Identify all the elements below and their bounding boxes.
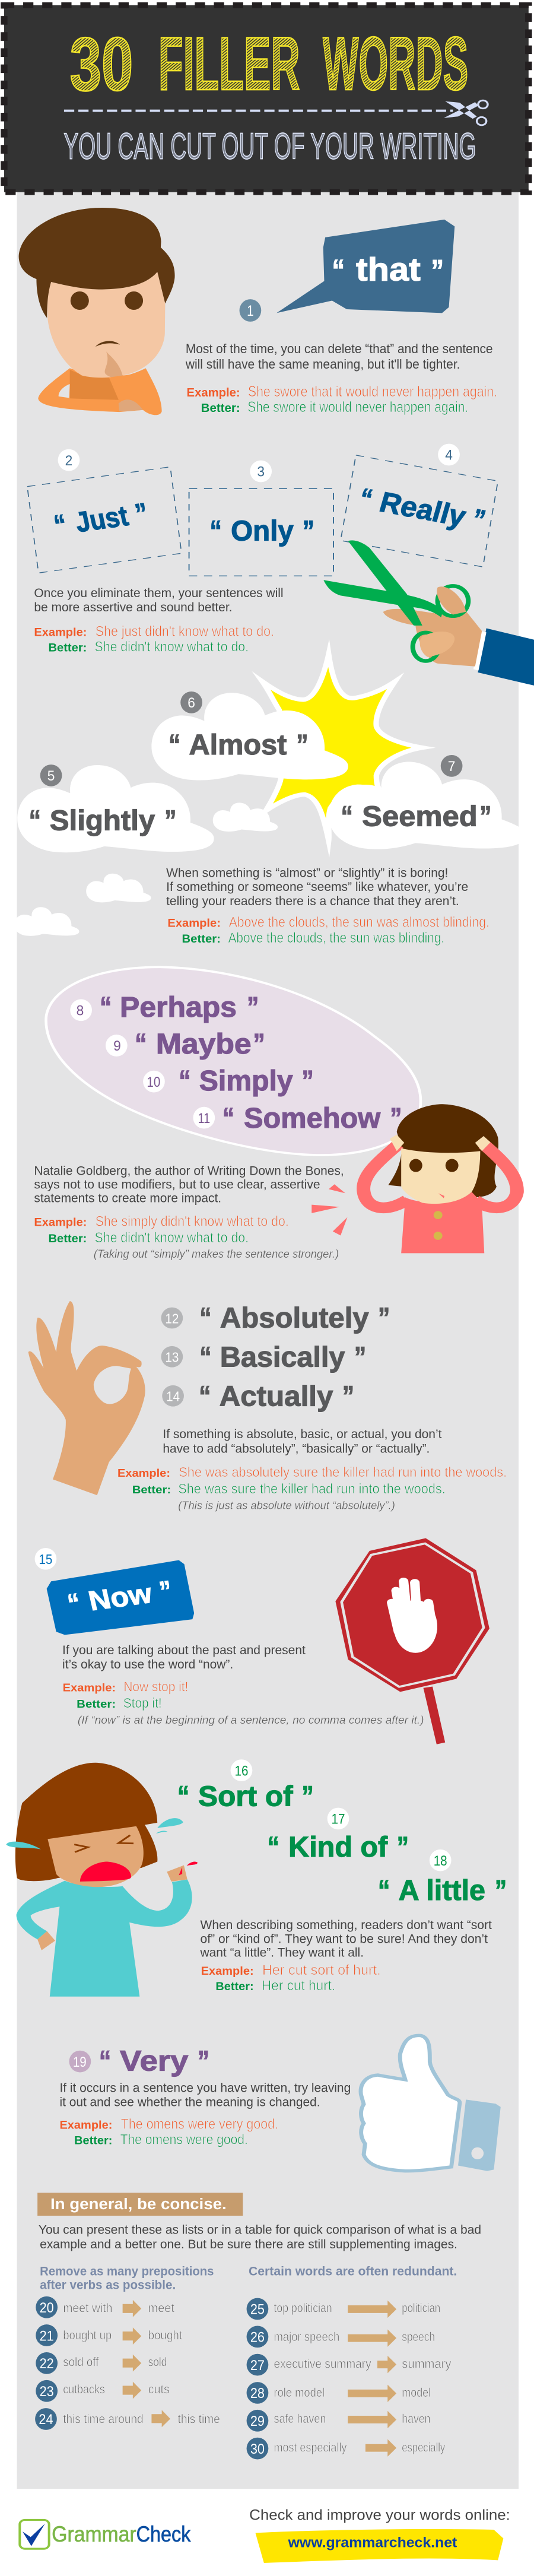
cut-out box: Only: Only bbox=[231, 515, 294, 547]
number 14 bbox=[162, 1385, 184, 1407]
example: simply: She didn't know what to do. bbox=[95, 1230, 249, 1245]
item 21 bbox=[36, 2324, 182, 2346]
number 16: 16 bbox=[234, 1763, 248, 1779]
heading: be concise bbox=[37, 2193, 243, 2216]
number 6 bbox=[180, 691, 202, 713]
thought bubble: modifiers: Maybe bbox=[156, 1028, 252, 1059]
icon: cut line and scissors bbox=[64, 100, 488, 125]
item 30: 30 bbox=[250, 2441, 265, 2457]
item 26: major speech bbox=[274, 2330, 339, 2344]
item 22: 22 bbox=[40, 2356, 54, 2371]
cut-out box: Just: Just bbox=[72, 500, 131, 538]
small clouds bbox=[14, 802, 278, 936]
subheading: prepositions: after verbs as possible. bbox=[40, 2278, 176, 2292]
words: Absolutely Basically Actually: ” bbox=[354, 1341, 366, 1373]
example: now: Better: bbox=[77, 1698, 116, 1711]
example: simply bbox=[34, 1213, 339, 1261]
words: Absolutely Basically Actually: “ bbox=[199, 1380, 211, 1412]
illustration: stop sign bbox=[335, 1538, 490, 1744]
cut-out box: Really: Really bbox=[376, 486, 469, 532]
example: that: Example: bbox=[187, 386, 240, 399]
words: Absolutely Basically Actually: Actually bbox=[220, 1380, 333, 1412]
item 22: sold bbox=[148, 2355, 167, 2369]
item 25: politician bbox=[402, 2301, 440, 2315]
example: absolutely bbox=[117, 1464, 507, 1512]
number 18: 18 bbox=[434, 1853, 447, 1868]
item 27: 27 bbox=[250, 2358, 265, 2373]
text: Natalie Goldberg: statements to create more impact. bbox=[34, 1191, 221, 1205]
example: very: Better: bbox=[74, 2134, 112, 2147]
text: once you eliminate bbox=[34, 586, 284, 614]
example: now: Stop it! bbox=[123, 1695, 162, 1711]
cut-out box: Only bbox=[189, 488, 333, 576]
text: Natalie Goldberg: says not to use modifiers, but to use clear, assertive bbox=[34, 1178, 320, 1192]
number 7: 7 bbox=[448, 759, 455, 774]
speech bubble: that: ” bbox=[431, 253, 444, 287]
number 14: 14 bbox=[166, 1389, 180, 1404]
subheading: redundant: Certain words are often redundant. bbox=[249, 2264, 457, 2279]
thought bubble: modifiers: “ bbox=[223, 1103, 234, 1134]
speech bubble: that: “ bbox=[332, 253, 345, 287]
words: Sort of Kind of A little bbox=[177, 1781, 507, 1906]
example: sort of bbox=[201, 1962, 381, 1994]
thought bubble: modifiers: Simply bbox=[199, 1065, 293, 1096]
cut-out box: Really bbox=[341, 455, 498, 567]
item 24 bbox=[35, 2408, 220, 2430]
number 3 bbox=[250, 461, 272, 482]
words: Sort of Kind of A little: ” bbox=[302, 1781, 314, 1812]
cut-out box: Just: “ bbox=[51, 509, 70, 541]
thought bubble: modifiers: Perhaps bbox=[120, 991, 237, 1023]
words: Sort of Kind of A little: “ bbox=[268, 1832, 279, 1863]
banner: Now: Now bbox=[85, 1578, 155, 1617]
cut-out box: Only: ” bbox=[303, 515, 314, 547]
speech bubble: that bbox=[276, 220, 454, 313]
cloud: Almost bbox=[151, 693, 348, 781]
thought bubble: modifiers: ” bbox=[253, 1028, 265, 1059]
thought bubble: modifiers: “ bbox=[179, 1065, 190, 1096]
example: almost bbox=[167, 915, 490, 946]
word: Very: ” bbox=[198, 2045, 209, 2077]
words: Sort of Kind of A little: ” bbox=[397, 1832, 409, 1863]
number 6: 6 bbox=[187, 695, 195, 710]
example: absolutely: Example: bbox=[117, 1467, 170, 1479]
item 28: 28 bbox=[250, 2385, 265, 2401]
item 27: executive summary bbox=[274, 2357, 371, 2371]
example: just: Example: bbox=[34, 626, 87, 639]
item 23 bbox=[36, 2380, 170, 2402]
illustration: crying girl bbox=[6, 1763, 198, 1997]
thought bubble: modifiers bbox=[46, 967, 421, 1155]
cloud: Slightly: ” bbox=[164, 805, 176, 836]
number 18 bbox=[430, 1849, 452, 1871]
number 12 bbox=[161, 1308, 183, 1328]
item 23: cutbacks bbox=[63, 2383, 105, 2397]
thought bubble: modifiers: ” bbox=[302, 1065, 314, 1096]
text: Natalie Goldberg: Natalie Goldberg, the author of Writing Down the Bones, bbox=[34, 1164, 344, 1178]
number 1 bbox=[240, 299, 261, 322]
item 28 bbox=[247, 2382, 431, 2404]
cut-out box: Really: ” bbox=[468, 503, 489, 536]
item 21: bought up bbox=[63, 2328, 112, 2343]
thought bubble: modifiers: “ bbox=[100, 991, 112, 1023]
banner: Now: ” bbox=[157, 1575, 175, 1607]
item 21: 21 bbox=[40, 2328, 54, 2344]
example: sort of: Her cut hurt. bbox=[262, 1978, 335, 1994]
cut-out box: Just bbox=[27, 467, 182, 573]
words: Sort of Kind of A little: “ bbox=[378, 1874, 390, 1906]
item 27: summary bbox=[402, 2357, 452, 2371]
item 20: 20 bbox=[40, 2300, 54, 2315]
number 19 bbox=[69, 2051, 91, 2072]
words: Absolutely Basically Actually: “ bbox=[199, 1341, 211, 1373]
cloud: Slightly: “ bbox=[29, 805, 41, 836]
list: prepositions 20-24 bbox=[35, 2296, 220, 2430]
number 13 bbox=[161, 1346, 183, 1368]
words: Sort of Kind of A little: Sort of bbox=[198, 1781, 294, 1812]
text: that explanation bbox=[185, 342, 493, 372]
words: Absolutely Basically Actually: ” bbox=[342, 1380, 354, 1412]
text: once you eliminate: Once you eliminate them, your sentences will bbox=[34, 586, 284, 600]
number 7 bbox=[441, 755, 462, 777]
item 27 bbox=[247, 2354, 452, 2376]
example: almost: Example: bbox=[167, 916, 221, 929]
item 22 bbox=[36, 2352, 167, 2374]
example: now: (If “now” is at the beginning of a sentence, no comma comes after it.) bbox=[78, 1714, 424, 1726]
item 29: 29 bbox=[250, 2413, 265, 2429]
thought bubble: modifiers: ” bbox=[390, 1103, 402, 1134]
cut-out box: Just: ” bbox=[132, 497, 151, 530]
number 19: 19 bbox=[73, 2054, 87, 2070]
example: now: Example: bbox=[63, 1681, 116, 1694]
cut-out box: Really: “ bbox=[355, 483, 376, 515]
item 26: 26 bbox=[250, 2329, 265, 2345]
item 25 bbox=[247, 2298, 440, 2320]
number 9 bbox=[106, 1035, 128, 1057]
number 4: 4 bbox=[445, 447, 453, 463]
number 2: 2 bbox=[65, 453, 72, 468]
number 15: 15 bbox=[39, 1552, 52, 1567]
item 30 bbox=[247, 2438, 445, 2459]
header banner bbox=[4, 5, 529, 415]
illustration: hand with green scissors bbox=[323, 540, 534, 686]
number 4 bbox=[438, 444, 460, 465]
banner: Now: “ bbox=[65, 1588, 84, 1620]
example: just: Better: bbox=[49, 641, 87, 654]
words: Absolutely Basically Actually bbox=[199, 1302, 390, 1412]
thought bubble: modifiers: ” bbox=[247, 991, 259, 1023]
example: simply: She simply didn't know what to do. bbox=[96, 1213, 289, 1229]
cloud: Seemed bbox=[329, 762, 525, 849]
illustration: frustrated girl bbox=[312, 1104, 517, 1253]
text: that explanation: will still have the same meaning, but it'll be tighter. bbox=[185, 357, 460, 372]
text: leave it out: If it occurs in a sentence you have written, try leaving bbox=[59, 2081, 351, 2095]
item 29 bbox=[247, 2410, 431, 2432]
number 11 bbox=[193, 1107, 215, 1129]
item 29: haven bbox=[402, 2412, 431, 2426]
example: now bbox=[63, 1679, 424, 1726]
number 13: 13 bbox=[165, 1350, 179, 1365]
cloud: Seemed: Seemed bbox=[362, 801, 478, 832]
illustration: sun burst bbox=[262, 654, 422, 841]
logo: GrammarCheck: Grammar bbox=[52, 2522, 136, 2546]
number 9: 9 bbox=[113, 1038, 121, 1054]
illustration: thumbs up bbox=[361, 2035, 501, 2171]
example: almost: Better: bbox=[182, 932, 221, 945]
highlight with website url bbox=[255, 2529, 503, 2563]
number 10 bbox=[143, 1071, 165, 1092]
number 1: 1 bbox=[247, 302, 254, 319]
text: present as lists bbox=[39, 2223, 481, 2251]
words: Sort of Kind of A little: ” bbox=[495, 1874, 507, 1906]
item 29: safe haven bbox=[274, 2412, 326, 2426]
word: Very: “ bbox=[99, 2045, 111, 2077]
cloud: Seemed: ” bbox=[479, 801, 491, 832]
text: absolute basic actual bbox=[163, 1427, 442, 1456]
number 5 bbox=[40, 764, 62, 786]
item 30: especially bbox=[402, 2441, 445, 2455]
example: just: She just didn't know what to do. bbox=[96, 623, 274, 639]
item 23: 23 bbox=[40, 2384, 54, 2399]
text: almost slightly seemed: telling your readers there is a chance that they aren’t. bbox=[166, 894, 459, 908]
illustration: OK hand bbox=[28, 1301, 145, 1495]
example: just: She didn't know what to do. bbox=[95, 639, 249, 655]
subheading: prepositions bbox=[40, 2264, 214, 2292]
text: past and present bbox=[62, 1644, 306, 1671]
logo: GrammarCheck: Check bbox=[136, 2522, 191, 2546]
number 16 bbox=[231, 1759, 252, 1781]
item 26 bbox=[247, 2326, 435, 2347]
example: now: Now stop it! bbox=[123, 1679, 188, 1695]
item 25: 25 bbox=[250, 2302, 265, 2317]
example: just bbox=[34, 623, 274, 655]
speech bubble: that: that bbox=[356, 251, 421, 287]
text: describing something: want “a little”. They want it all. bbox=[200, 1946, 364, 1960]
example: very: Example: bbox=[59, 2118, 112, 2131]
text: Natalie Goldberg bbox=[34, 1164, 344, 1205]
example: that: Better: bbox=[201, 401, 240, 415]
words: Absolutely Basically Actually: “ bbox=[199, 1302, 211, 1334]
number 10: 10 bbox=[147, 1074, 160, 1090]
example: sort of: Example: bbox=[201, 1964, 254, 1977]
word: Very bbox=[99, 2045, 209, 2077]
item 22: sold off bbox=[63, 2355, 99, 2369]
cloud: Almost: Almost bbox=[189, 729, 287, 761]
title: 30 bbox=[70, 23, 133, 107]
example: very bbox=[59, 2116, 278, 2147]
heading: be concise: In general, be concise. bbox=[50, 2196, 227, 2213]
cloud: Seemed: “ bbox=[341, 801, 353, 832]
number 3: 3 bbox=[257, 464, 265, 480]
words: Sort of Kind of A little: A little bbox=[399, 1874, 485, 1906]
example: very: The omens were good. bbox=[120, 2131, 248, 2147]
example: simply: Better: bbox=[49, 1232, 87, 1245]
example: absolutely: Better: bbox=[132, 1483, 171, 1496]
item 24: 24 bbox=[39, 2412, 53, 2428]
item 26: speech bbox=[402, 2330, 435, 2344]
number 2 bbox=[58, 449, 80, 471]
illustration: thinking boy bbox=[19, 208, 175, 415]
item 25: top politician bbox=[274, 2301, 332, 2315]
words: Sort of Kind of A little: “ bbox=[177, 1781, 189, 1812]
cloud: Almost: ” bbox=[296, 729, 308, 761]
example: simply: Example: bbox=[34, 1216, 87, 1229]
cloud: Slightly bbox=[17, 765, 214, 852]
item 24: this time around bbox=[63, 2412, 144, 2426]
item 24: this time bbox=[178, 2412, 220, 2426]
list: redundant 25-30 bbox=[247, 2298, 452, 2459]
subheading: prepositions: Remove as many prepositions bbox=[40, 2264, 214, 2279]
highlight with website url: www.grammarcheck.net bbox=[288, 2534, 457, 2550]
item 23: cuts bbox=[148, 2383, 170, 2397]
title: FILLER bbox=[158, 22, 300, 106]
thought bubble: modifiers: “ bbox=[135, 1028, 147, 1059]
words: Sort of Kind of A little: Kind of bbox=[288, 1832, 388, 1863]
example: sort of: Better: bbox=[215, 1980, 254, 1993]
item 30: most especially bbox=[274, 2441, 347, 2455]
cloud: Slightly: Slightly bbox=[50, 805, 155, 836]
example: simply: (Taking out “simply” makes the sentence stronger.) bbox=[94, 1248, 339, 1261]
thought bubble: modifiers: Somehow bbox=[244, 1103, 381, 1134]
item 28: model bbox=[402, 2385, 431, 2400]
text: almost slightly seemed bbox=[166, 866, 468, 908]
item 20 bbox=[36, 2296, 174, 2318]
logo: GrammarCheck bbox=[20, 2520, 191, 2549]
number 17 bbox=[328, 1808, 349, 1829]
number 8 bbox=[70, 999, 92, 1021]
number 15 bbox=[35, 1548, 56, 1570]
word: Very: Very bbox=[120, 2045, 188, 2077]
example: sort of: Her cut sort of hurt. bbox=[262, 1962, 381, 1978]
example: absolutely: (This is just as absolute without “absolutely”.) bbox=[178, 1499, 395, 1512]
banner: Now bbox=[47, 1560, 194, 1635]
item 21: bought bbox=[148, 2328, 182, 2343]
text: once you eliminate: be more assertive and sound better. bbox=[34, 600, 232, 614]
text: describing something bbox=[200, 1918, 492, 1960]
words: Absolutely Basically Actually: Absolutely bbox=[220, 1302, 369, 1334]
cut-out box: Only: “ bbox=[210, 515, 222, 547]
text: absolute basic actual: have to add “absolutely”, “basically” or “actually”. bbox=[163, 1442, 430, 1456]
number 17: 17 bbox=[332, 1811, 345, 1827]
text: leave it out: it out and see whether the meaning is changed. bbox=[59, 2095, 320, 2109]
item 20: meet bbox=[148, 2301, 174, 2315]
item 28: role model bbox=[274, 2385, 325, 2400]
number 11: 11 bbox=[198, 1111, 210, 1126]
number 5: 5 bbox=[47, 768, 55, 783]
words: Absolutely Basically Actually: ” bbox=[378, 1302, 390, 1334]
example: almost: Above the clouds, the sun was blinding. bbox=[228, 930, 444, 946]
cloud: Almost: “ bbox=[169, 729, 180, 761]
example: that bbox=[187, 383, 497, 415]
text: leave it out bbox=[59, 2081, 351, 2109]
text: absolute basic actual: If something is absolute, basic, or actual, you don’t bbox=[163, 1427, 442, 1441]
number 8: 8 bbox=[77, 1003, 84, 1019]
text: past and present: it’s okay to use the word “now”. bbox=[62, 1658, 233, 1671]
words: Absolutely Basically Actually: Basically bbox=[220, 1341, 345, 1373]
text: almost slightly seemed: When something is “almost” or “slightly” it is boring! bbox=[166, 866, 448, 880]
text: past and present: If you are talking about the past and present bbox=[62, 1644, 306, 1657]
item 20: meet with bbox=[63, 2301, 112, 2315]
example: very: The omens were very good. bbox=[121, 2116, 278, 2132]
number 12: 12 bbox=[165, 1311, 179, 1327]
